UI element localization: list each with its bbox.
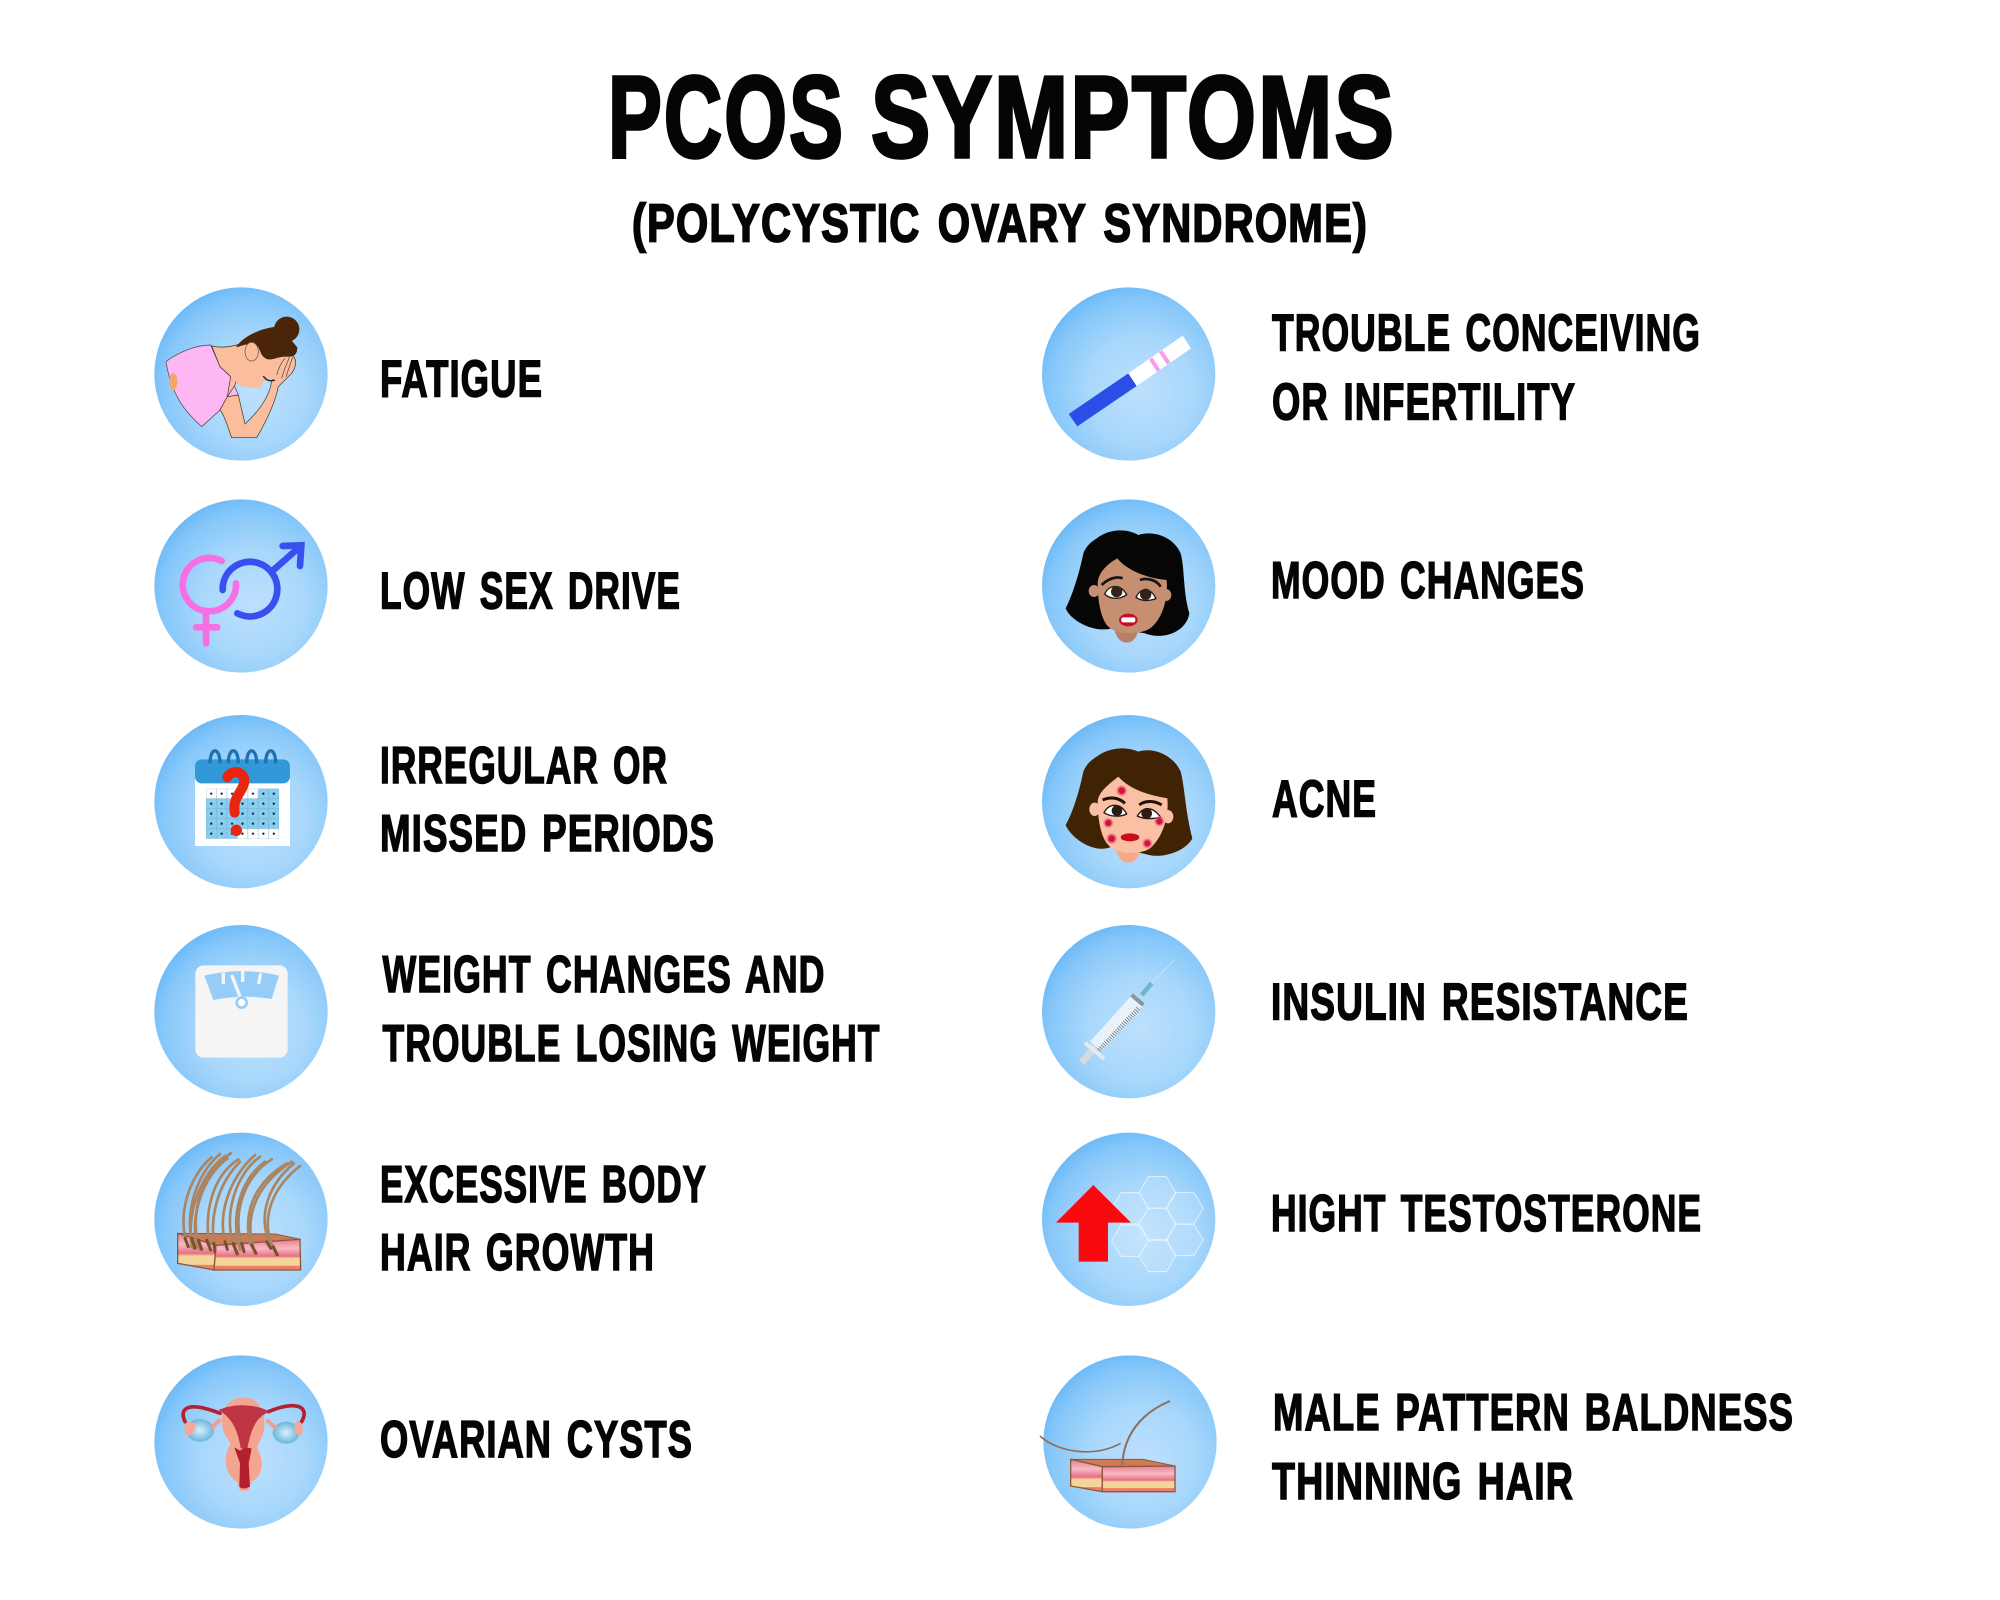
hairs <box>184 1153 300 1255</box>
plunger <box>1082 1047 1095 1063</box>
fallen hair <box>1040 1436 1121 1452</box>
icon: pregnancy test <box>1042 287 1215 461</box>
left ovary <box>186 1419 214 1442</box>
neck <box>1116 848 1141 863</box>
icon: thinning hair <box>1040 1355 1217 1529</box>
label: excessive hair: HAIR GROWTH <box>380 1224 655 1282</box>
brows <box>1103 798 1162 805</box>
icon: body hair growth <box>154 1133 328 1306</box>
follicles <box>185 1238 277 1255</box>
label: weight changes: TROUBLE LOSING WEIGHT <box>382 1015 880 1073</box>
label: irregular periods: IRREGULAR OR <box>380 737 668 795</box>
skin right face <box>1102 1466 1175 1492</box>
label: trouble conceiving: OR INFERTILITY <box>1272 374 1576 432</box>
graduations <box>1099 1007 1139 1050</box>
mouth <box>1119 614 1138 626</box>
barrel <box>1096 1001 1137 1047</box>
test strip <box>1128 336 1191 386</box>
calendar page <box>195 778 290 846</box>
icon: weighing scale <box>154 925 328 1098</box>
face <box>1098 777 1168 853</box>
dial pivot <box>237 998 247 1008</box>
ear <box>245 342 258 361</box>
irises <box>1111 586 1151 600</box>
label: irregular periods <box>380 737 715 863</box>
label: male pattern baldness: MALE PATTERN BALDNESS <box>1273 1384 1794 1442</box>
label: excessive hair <box>380 1156 707 1282</box>
label: weight changes <box>382 946 880 1073</box>
icon: syringe <box>1042 925 1215 1098</box>
skin left face <box>178 1233 216 1270</box>
icon: calendar <box>154 715 328 888</box>
label: acne: ACNE <box>1272 770 1377 828</box>
calendar blue days <box>206 789 279 839</box>
red arrow <box>1056 1185 1131 1262</box>
dial ticks <box>223 971 261 997</box>
female symbol <box>183 558 236 643</box>
shirt <box>166 345 238 427</box>
cervix <box>234 1447 252 1488</box>
arm and neck <box>212 344 296 438</box>
hair <box>1066 530 1189 636</box>
ovary tissue <box>184 1421 303 1437</box>
calendar header <box>195 759 290 783</box>
label: high testosterone: HIGHT TESTOSTERONE <box>1271 1185 1702 1243</box>
neck <box>1114 628 1139 643</box>
question mark <box>227 772 244 813</box>
scale body <box>195 965 288 1058</box>
calendar grid <box>206 789 279 839</box>
label: trouble conceiving <box>1272 304 1701 432</box>
head <box>234 342 288 388</box>
label: insulin resistance: INSULIN RESISTANCE <box>1271 974 1689 1032</box>
icon: ovaries <box>154 1355 328 1529</box>
back patch <box>169 373 177 390</box>
label: low sex drive: LOW SEX DRIVE <box>380 562 681 620</box>
label: ovarian cysts: OVARIAN CYSTS <box>380 1411 693 1469</box>
needle <box>1152 959 1175 983</box>
hub <box>1142 983 1152 995</box>
ears <box>1089 585 1171 601</box>
irises <box>1112 805 1152 819</box>
uterus body <box>222 1397 264 1491</box>
collar <box>1132 995 1143 1005</box>
label: weight changes: WEIGHT CHANGES AND <box>382 946 826 1004</box>
teeth <box>1121 617 1135 622</box>
skin top <box>1071 1459 1175 1467</box>
hexagons <box>1112 1177 1203 1272</box>
test lines <box>1151 351 1169 371</box>
subtitle: (POLYCYSTIC OVARY SYNDROME) <box>632 194 1368 254</box>
ears <box>1089 803 1173 823</box>
closed eye <box>263 376 275 381</box>
uterine cavity <box>218 1405 270 1448</box>
icon: fatigue <box>154 287 328 461</box>
test handle <box>1069 373 1137 426</box>
fingers <box>277 357 293 378</box>
label: irregular periods: MISSED PERIODS <box>380 805 715 863</box>
label: fatigue: FATIGUE <box>380 350 543 408</box>
pimples <box>1103 785 1165 849</box>
label: male pattern baldness: THINNING HAIR <box>1272 1453 1574 1511</box>
icon: acne face <box>1042 715 1215 888</box>
skin left face <box>1071 1459 1102 1492</box>
icon: high testosterone <box>1042 1133 1215 1306</box>
ligaments <box>212 1419 276 1428</box>
face <box>1098 558 1167 633</box>
skin top <box>178 1233 301 1245</box>
hair <box>237 327 297 359</box>
hair <box>1066 748 1192 856</box>
right ovary <box>273 1422 299 1444</box>
male symbol <box>223 545 301 616</box>
fallopian tubes <box>183 1406 304 1422</box>
calendar rings <box>210 751 276 763</box>
icon: gender symbols <box>154 499 328 673</box>
label: mood changes: MOOD CHANGES <box>1271 552 1585 610</box>
label: male pattern baldness <box>1272 1384 1794 1511</box>
eye whites <box>1104 805 1161 819</box>
title: SYMPTOMS <box>871 52 1396 182</box>
mouth <box>1121 833 1139 841</box>
question mark dot <box>231 825 242 836</box>
growing hair <box>1122 1401 1170 1465</box>
eye whites <box>1105 587 1156 601</box>
flange <box>1085 1043 1104 1059</box>
label: trouble conceiving: TROUBLE CONCEIVING <box>1272 304 1701 362</box>
title: PCOS <box>608 52 845 182</box>
hair bun <box>274 317 299 342</box>
scale dial <box>204 971 279 1000</box>
title <box>608 52 1396 182</box>
skin right face <box>214 1239 301 1270</box>
icon: worried face <box>1042 499 1215 673</box>
brows <box>1102 577 1161 587</box>
label: excessive hair: EXCESSIVE BODY <box>380 1156 707 1214</box>
